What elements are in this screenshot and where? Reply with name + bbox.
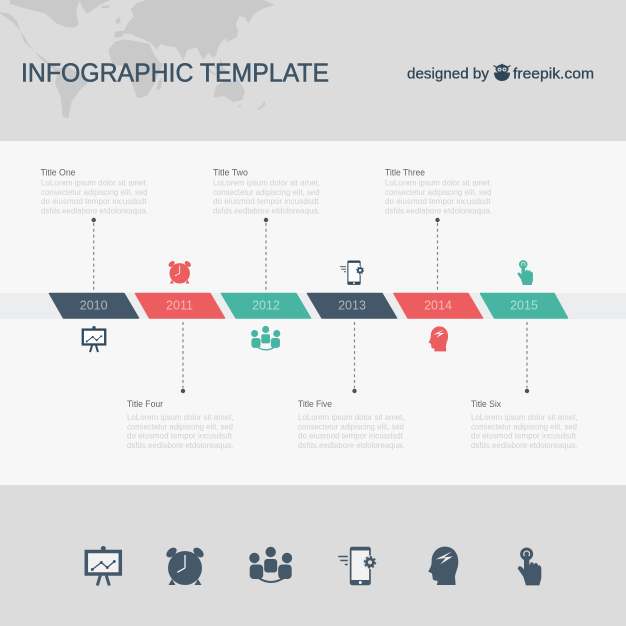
text block: title one: do eiusmod tempor incusdsdt: [41, 196, 147, 206]
connector: title two: [264, 218, 268, 290]
year 2012: [222, 294, 310, 318]
header panel: [0, 0, 626, 141]
year 2013: 2013: [338, 298, 366, 312]
text block: title three: [385, 168, 492, 215]
connector: title four: [181, 322, 185, 393]
icon: team: [249, 547, 292, 582]
text block: title two: Title Two: [213, 168, 248, 178]
year 2015: 2015: [510, 298, 538, 312]
icon: team, small: [251, 326, 280, 350]
icon: touch hand: [518, 549, 541, 585]
text block: title six: dsfds.eedlabore etdoloreaqua.: [471, 440, 578, 450]
icon: touch hand, small: [517, 261, 533, 285]
freepik credit: designed by: [407, 66, 489, 82]
text block: title two: [213, 168, 320, 215]
text block: title one: consectetur adipiscing elit, sed: [41, 187, 148, 197]
freepik credit: freepik.com: [513, 66, 594, 82]
text block: title four: do eiusmod tempor incusdsdt: [127, 431, 233, 441]
year 2014: [394, 294, 482, 318]
icon: head with lightning, small: [429, 326, 448, 351]
timeline band: [0, 293, 626, 319]
text block: title four: LoLorem ipsum dolor sit amet,: [127, 412, 234, 422]
text block: title three: dsfds.eedlabore etdoloreaqua.: [385, 205, 492, 215]
year 2011: [136, 294, 224, 318]
icon: head with lightning: [428, 547, 458, 585]
freepik credit: [407, 64, 594, 82]
timeline panel: [0, 141, 626, 485]
freepik logo: [494, 64, 510, 81]
year 2014: 2014: [424, 298, 452, 312]
text block: title four: consectetur adipiscing elit, sed: [127, 421, 233, 431]
text block: title six: do eiusmod tempor incusdsdt: [471, 431, 577, 441]
text block: title three: LoLorem ipsum dolor sit amet,: [385, 178, 492, 188]
connector: title one: [92, 218, 96, 290]
text block: title five: do eiusmod tempor incusdsdt: [298, 431, 404, 441]
text block: title three: do eiusmod tempor incusdsdt: [385, 196, 491, 206]
text block: title five: LoLorem ipsum dolor sit amet,: [298, 412, 404, 422]
connector: title three: [435, 218, 440, 290]
text block: title six: consectetur adipiscing elit, sed: [471, 421, 577, 431]
text block: title five: dsfds.eedlabore etdoloreaqua.: [298, 440, 404, 450]
icon: alarm clock, small: [167, 260, 192, 284]
icon: presentation board, small: [83, 326, 105, 352]
text block: title one: dsfds.eedlabore etdoloreaqua.: [41, 205, 148, 215]
text block: title two: consectetur adipiscing elit, sed: [213, 187, 320, 197]
year 2012: 2012: [252, 298, 280, 312]
icon: smartphone with gear: [338, 547, 377, 585]
text block: title one: [40, 168, 148, 215]
text block: title five: [298, 399, 404, 450]
world map: [0, 0, 275, 118]
connector: title six: [525, 322, 529, 393]
text block: title four: [127, 399, 234, 450]
text block: title two: dsfds.eedlabore etdoloreaqua.: [213, 205, 320, 215]
year 2013: [308, 294, 396, 318]
text block: title five: Title Five: [298, 399, 332, 409]
year 2015: [480, 294, 568, 318]
text block: title four: Title Four: [127, 399, 163, 409]
text block: title six: LoLorem ipsum dolor sit amet,: [471, 412, 578, 422]
connector: title five: [352, 322, 357, 393]
text block: title three: Title Three: [385, 168, 425, 178]
icon: smartphone with gear, small: [340, 260, 364, 285]
text block: title one: LoLorem ipsum dolor sit amet,: [41, 178, 148, 188]
year 2011: 2011: [166, 298, 193, 312]
text block: title four: dsfds.eedlabore etdoloreaqua.: [127, 440, 234, 450]
text block: title six: [471, 399, 578, 450]
text block: title two: do eiusmod tempor incusdsdt: [213, 196, 319, 206]
text block: title three: consectetur adipiscing elit, sed: [385, 187, 492, 197]
year 2010: [50, 294, 138, 318]
text block: title two: LoLorem ipsum dolor sit amet,: [213, 178, 320, 188]
text block: title six: Title Six: [471, 399, 501, 409]
icon: presentation board: [86, 546, 120, 586]
icon: alarm clock: [164, 546, 206, 585]
text block: title five: consectetur adipiscing elit, sed: [298, 421, 404, 431]
bottom icon row: [0, 485, 626, 626]
text block: title one: Title One: [40, 168, 76, 178]
year 2010: 2010: [80, 298, 108, 312]
title: INFOGRAPHIC TEMPLATE: [21, 60, 329, 88]
